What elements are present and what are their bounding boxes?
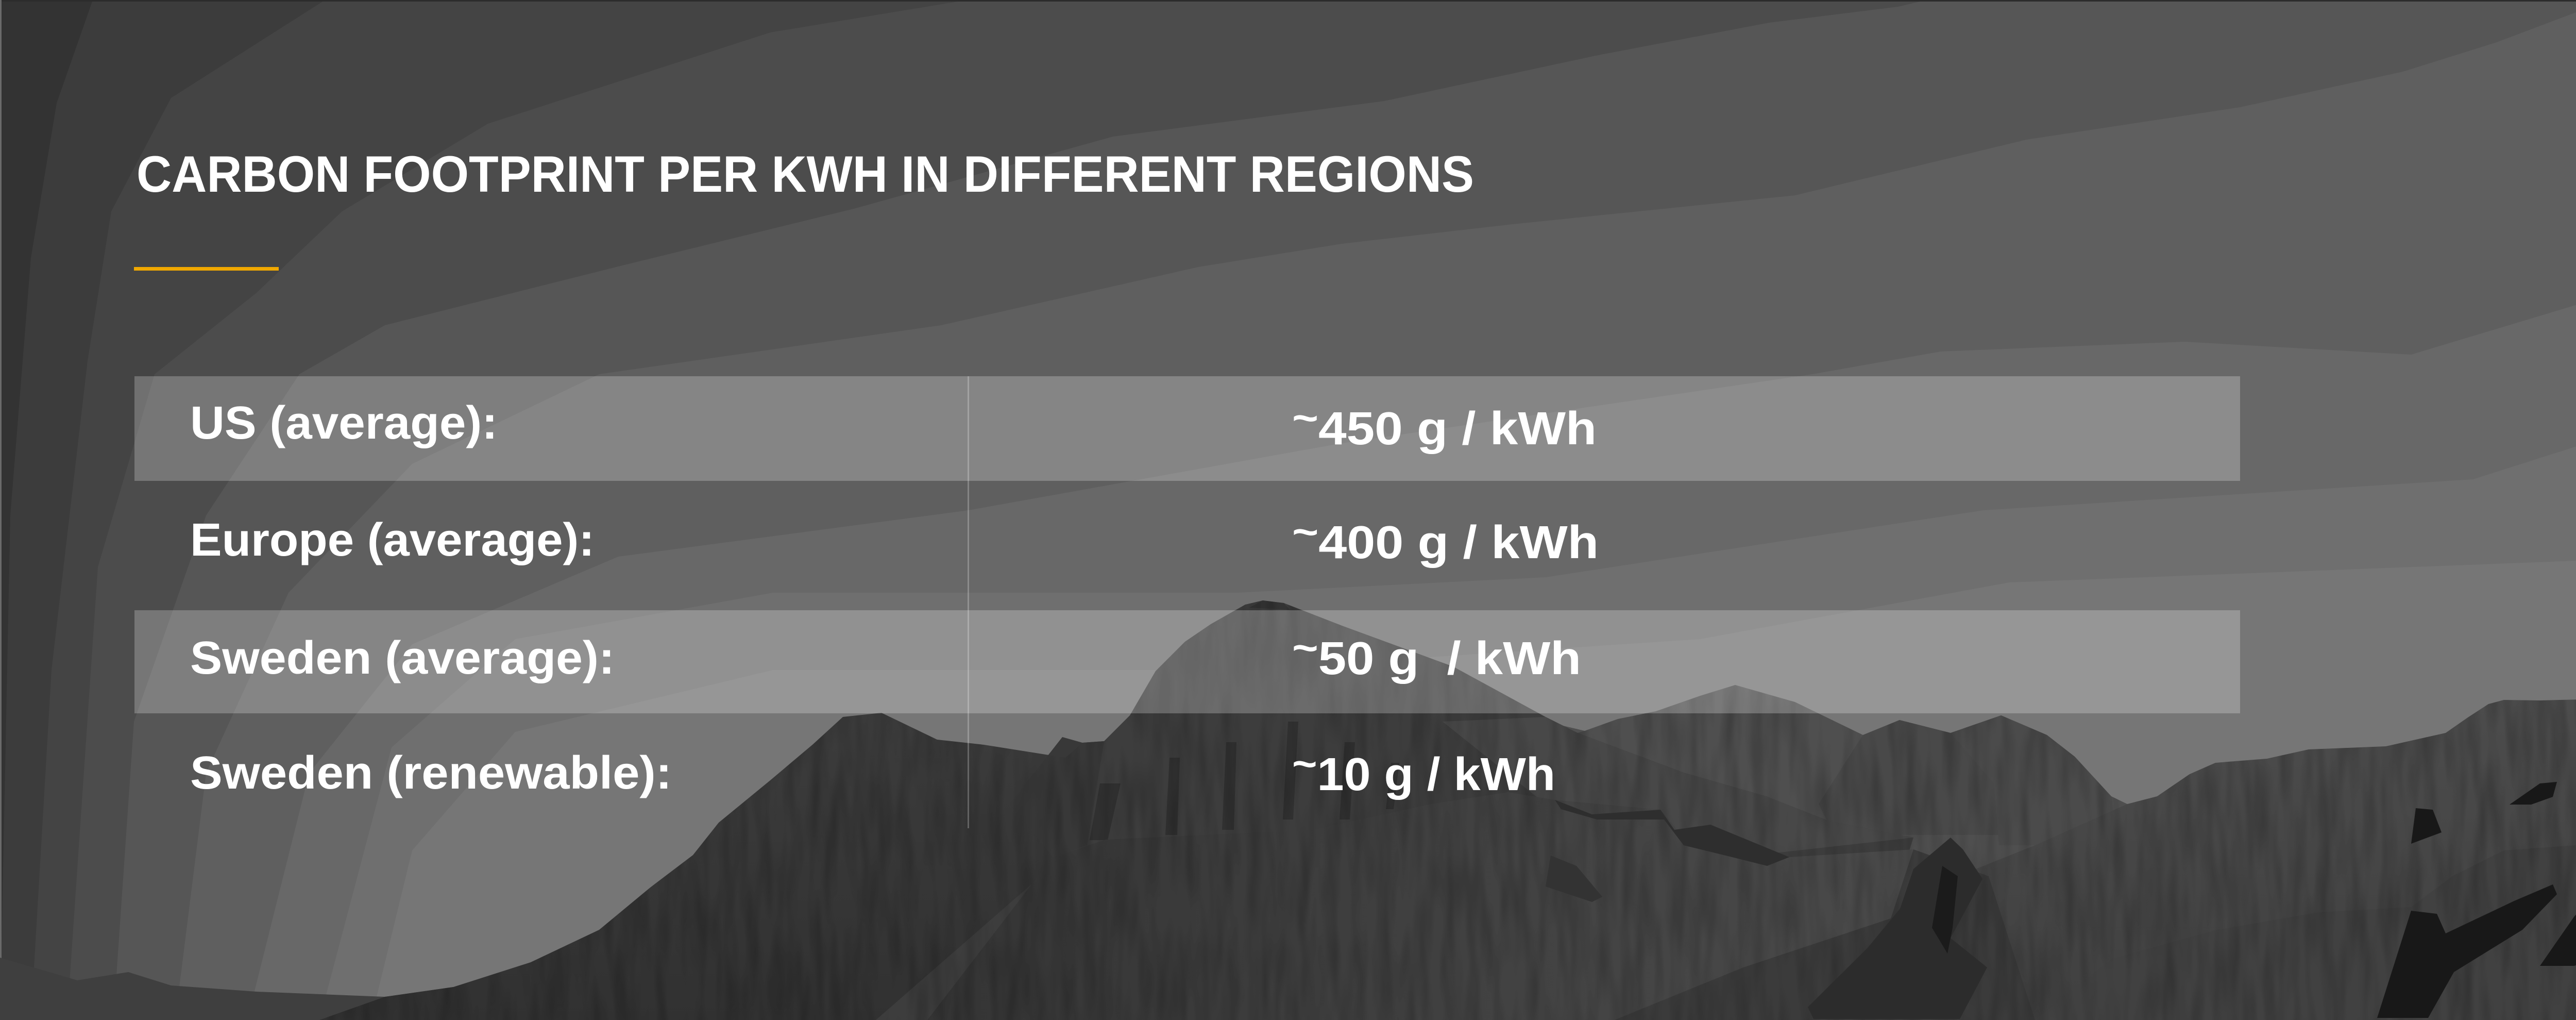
background: central peak [876,600,1913,1020]
label: Europe average: Europe (average): [190,514,595,566]
title: CARBON FOOTPRINT PER KWH IN DIFFERENT REGIONS [137,145,1474,203]
table: column divider [968,376,969,828]
background: distant mountain ridge [1546,685,2215,1020]
background: right mountain range [1906,696,2576,1020]
background: dark rock patches [1546,758,2576,1019]
value: US: ~ [1292,395,1318,441]
background: foreground slope [927,792,2035,1020]
label: Sweden renewable: Sweden (renewable): [190,747,672,799]
table: highlighted row Sweden average [134,610,2240,713]
label: US average: US (average): [190,397,498,449]
row: Sweden renewable [190,741,1555,800]
table: highlighted row US [134,376,2240,481]
label: Sweden average: Sweden (average): [190,632,615,684]
row: Europe [190,509,1599,568]
value: Sweden renewable: ~ [1292,741,1317,787]
value: Europe: 400 g / kWh [1318,517,1599,568]
row: US [190,395,1597,455]
row: Sweden average [190,625,1581,684]
background: far-left low hills [0,958,515,1020]
value: Sweden average: 50 g / kWh [1318,633,1581,684]
value: Sweden average: ~ [1292,625,1318,671]
background: rock texture streaks [319,600,2576,1020]
value: Sweden renewable: 10 g / kWh [1317,749,1555,800]
background: left mountain [319,713,1236,1020]
value: Europe: ~ [1292,509,1318,555]
accent underline [134,267,279,271]
value: US: 450 g / kWh [1318,403,1597,455]
